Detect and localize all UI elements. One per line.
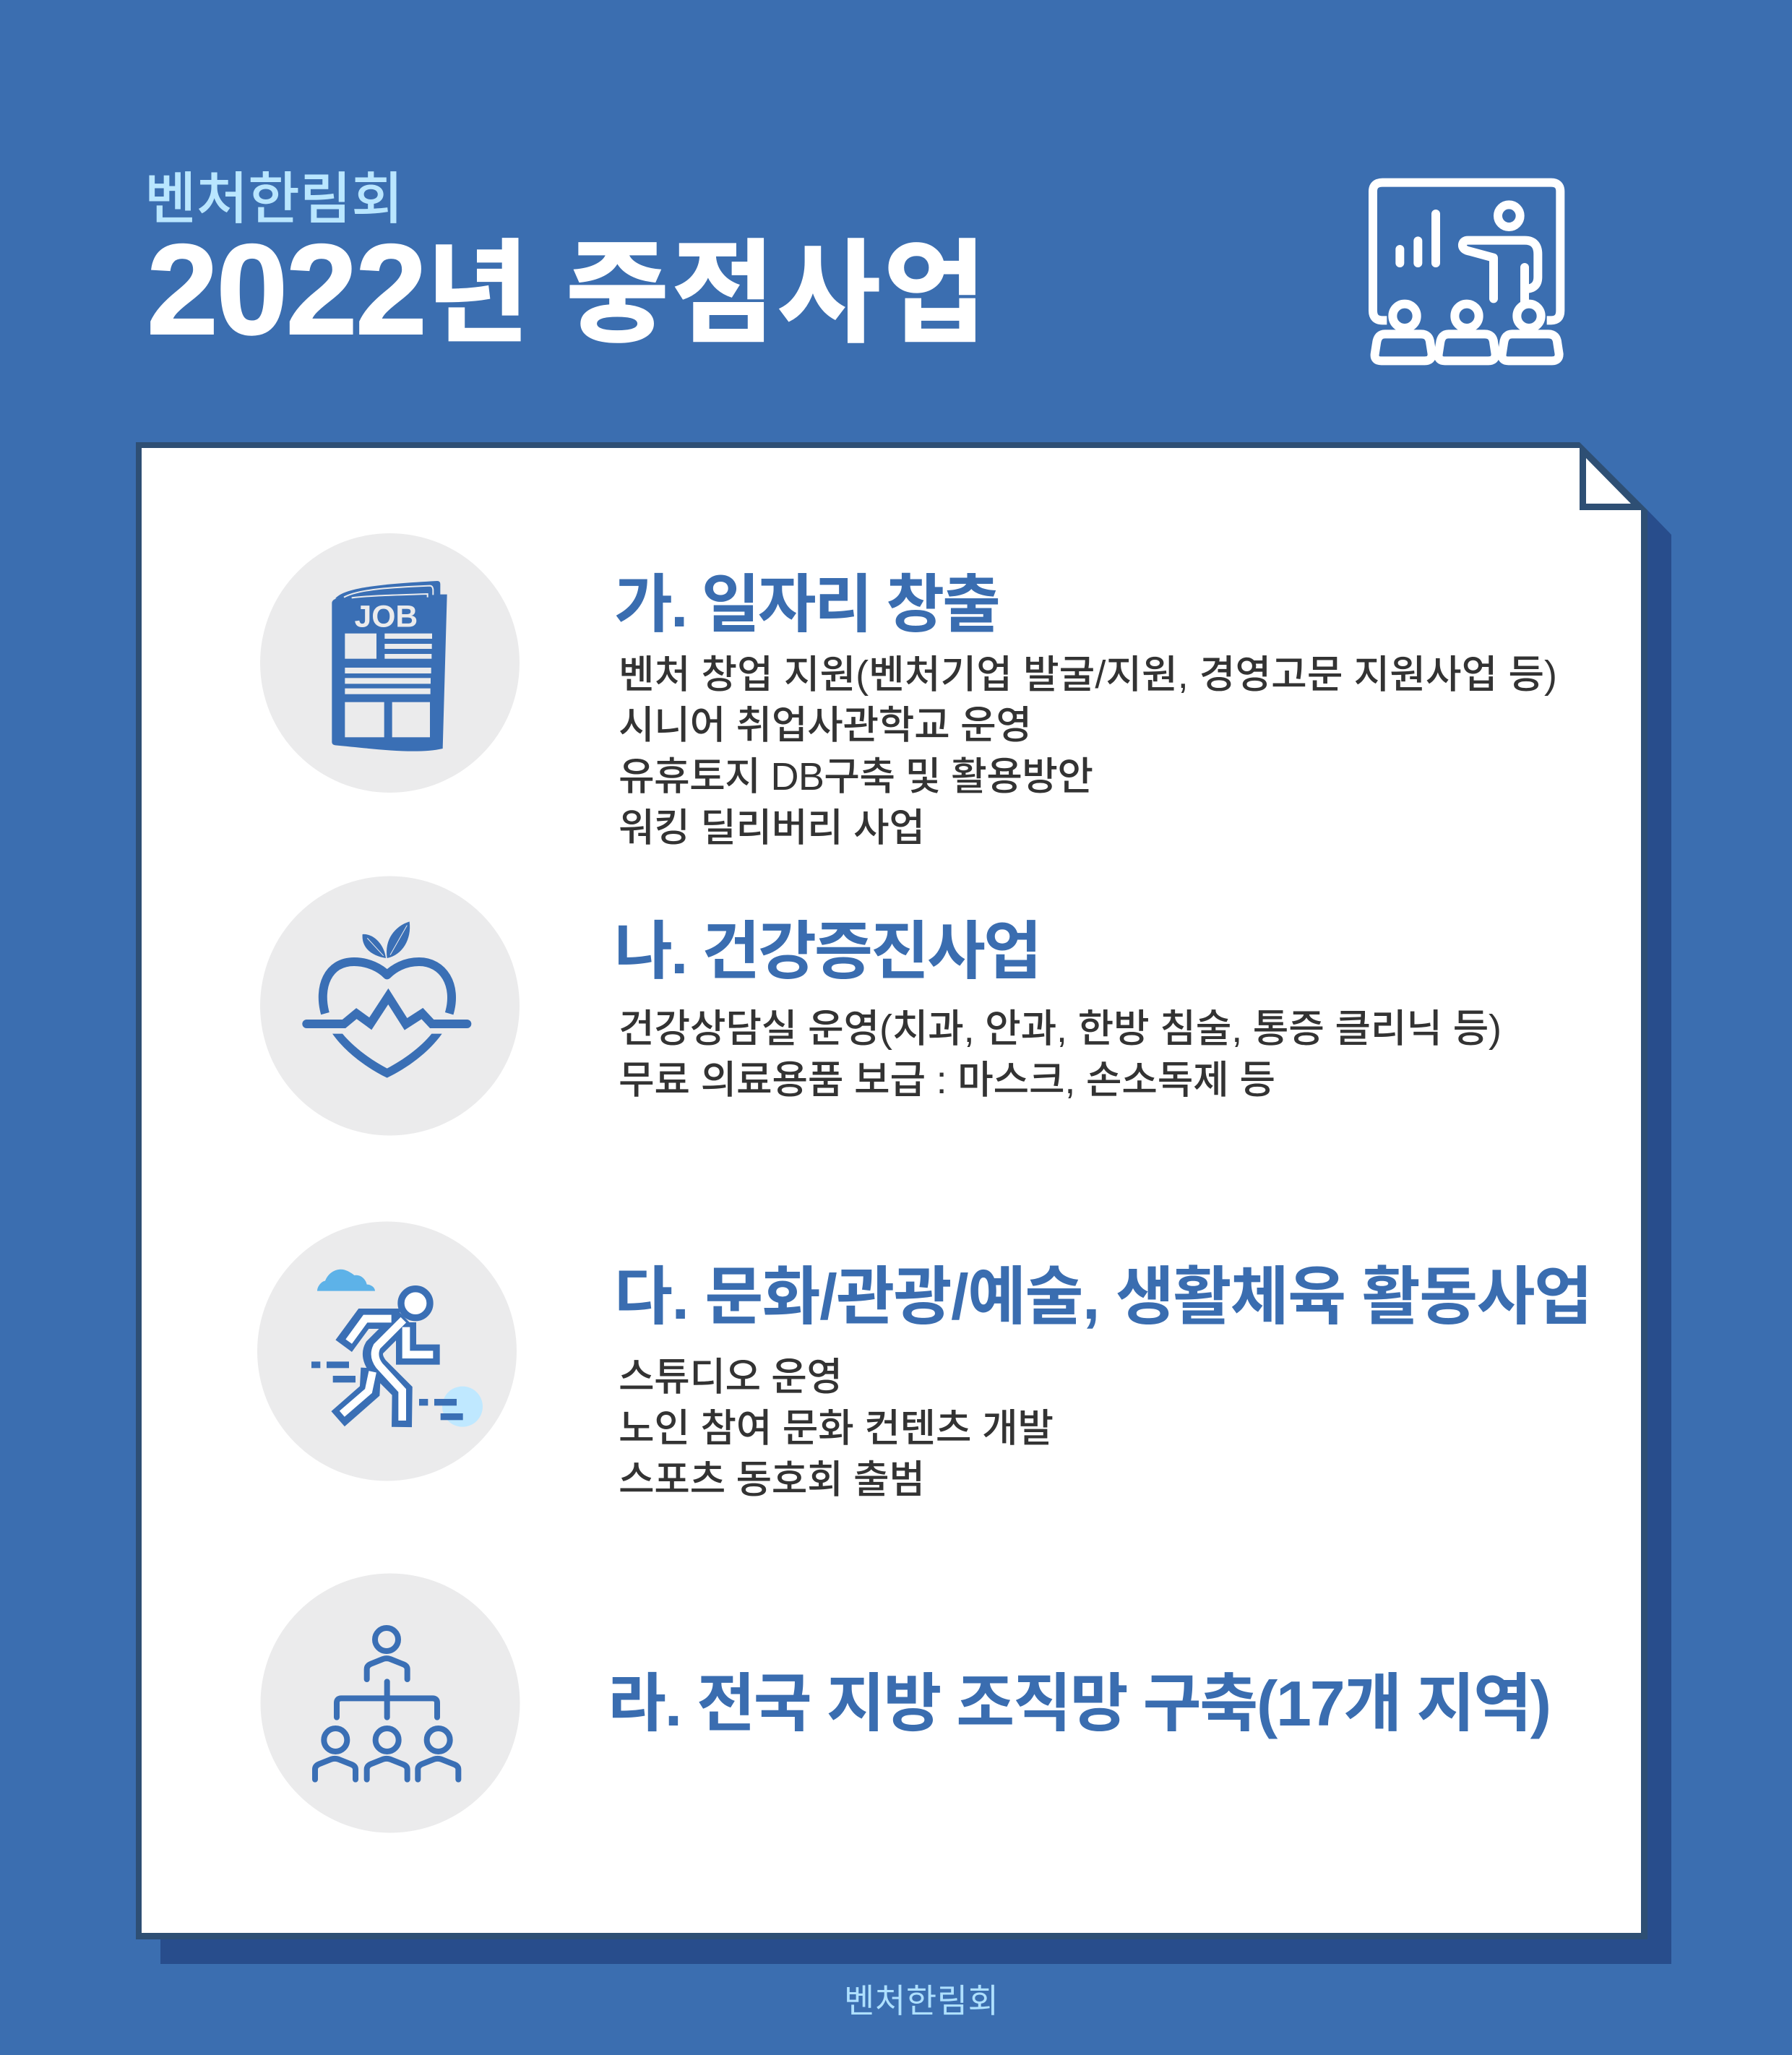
text block: culture: 스튜디오 운영 [619,1356,843,1399]
icon: presenter with audience [1373,183,1560,361]
subtitle: 벤처한림회 [145,167,403,231]
icon: runner [257,1221,517,1481]
icon: organization chart [260,1574,520,1832]
heading: regional network: 라. 전국 지방 조직망 구축(17개 지역) [608,1668,1551,1739]
panel: white note card with folded corner [136,442,1647,1939]
text block: jobs [619,653,1557,850]
text block: health [619,1007,1502,1102]
icon: job newspaper: JOB [354,600,418,634]
text block: health: 건강상담실 운영(치과, 안과, 한방 침술, 통증 클리닉 등) [619,1007,1502,1051]
text block: jobs: 벤처 창업 지원(벤처기업 발굴/지원, 경영고문 지원사업 등) [619,653,1557,697]
text block: health: 무료 의료용품 보급 : 마스크, 손소독제 등 [619,1059,1275,1102]
heading: culture: 다. 문화/관광/예술, 생활체육 활동사업 [614,1261,1593,1332]
text block: culture: 노인 참여 문화 컨텐츠 개발 [619,1407,1054,1450]
heading: jobs: 가. 일자리 창출 [614,569,1001,640]
heading: health: 나. 건강증진사업 [614,916,1042,987]
text block: jobs: 시니어 취업사관학교 운영 [619,704,1032,747]
icon: job newspaper [260,533,520,793]
title: 년 중점사업 [426,231,986,356]
footer: 벤처한림회 [844,1982,999,2020]
text block: jobs: 유휴토지 DB구축 및 활용방안 [619,755,1093,798]
text block: culture: 스포츠 동호회 출범 [619,1458,925,1502]
text block: culture [619,1356,1054,1502]
card shadow [160,510,1671,1964]
text block: jobs: 워킹 딜리버리 사업 [619,806,925,850]
title: 2022 [147,217,427,361]
icon: heart with leaves and pulse [260,876,520,1136]
